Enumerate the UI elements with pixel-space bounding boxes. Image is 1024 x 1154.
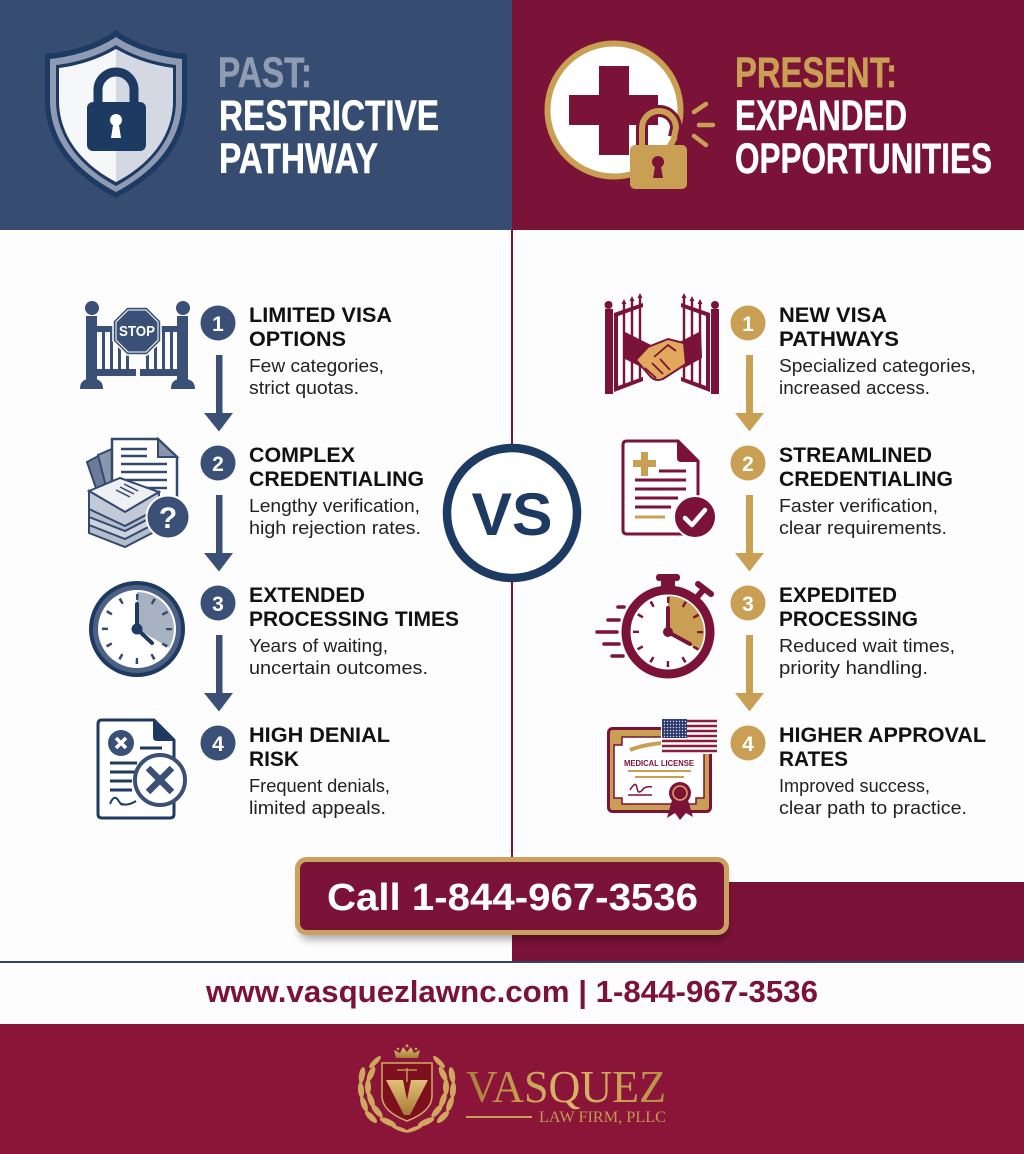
step 2 text: CREDENTIALING — [249, 468, 424, 491]
arrow 3 to 4 — [735, 635, 764, 712]
step 4 badge — [200, 726, 236, 760]
icon: open gates with handshake — [604, 293, 719, 394]
step 4 badge: 4 — [212, 733, 224, 756]
panel: past steps — [80, 301, 459, 818]
step 3 text: Reduced wait times, — [779, 635, 955, 656]
step 4 text — [779, 724, 986, 818]
step 3 text: uncertain outcomes. — [249, 657, 428, 678]
step 4 text: RATES — [779, 748, 848, 771]
step 2 text: STREAMLINED — [779, 444, 932, 467]
step 4 text: RISK — [249, 748, 299, 771]
step 2 badge: 2 — [742, 453, 754, 476]
step 4 text: HIGH DENIAL — [249, 724, 390, 747]
step 2 badge — [730, 446, 766, 480]
step 1 text: NEW VISA — [779, 304, 887, 327]
step 1 text: Few categories, — [249, 355, 384, 376]
step 4 text: limited appeals. — [249, 797, 386, 818]
logo: wordmark: LAW FIRM, PLLC — [539, 1109, 666, 1126]
step 3 badge: 3 — [212, 593, 224, 616]
arrow 2 to 3 — [204, 495, 233, 572]
step 3 text: priority handling. — [779, 657, 928, 678]
VS badge — [447, 448, 577, 578]
heading: present expanded opportunities: EXPANDED — [735, 92, 907, 140]
icon: paper stack with question mark: ? — [159, 502, 177, 535]
step 3 text — [249, 584, 459, 678]
icon: stopwatch — [597, 574, 711, 674]
panel: footer — [0, 1024, 1024, 1154]
step 2 text: Faster verification, — [779, 495, 938, 516]
step 4 text: Frequent denials, — [249, 775, 390, 796]
step 2 text: COMPLEX — [249, 444, 355, 467]
step 3 text: PROCESSING TIMES — [249, 608, 459, 631]
step 1 text: OPTIONS — [249, 328, 346, 351]
step 1 text: PATHWAYS — [779, 328, 899, 351]
icon: document with check — [623, 440, 716, 538]
step 1 text: LIMITED VISA — [249, 304, 392, 327]
step 4 text: Improved success, — [779, 775, 930, 796]
icon: medical cross with open lock — [548, 44, 713, 189]
panel: past header — [0, 0, 512, 230]
heading: present expanded opportunities: PRESENT: — [735, 49, 897, 97]
icon: denied document — [98, 720, 185, 818]
panel: present header — [512, 0, 1024, 230]
step 2 text — [249, 444, 424, 538]
logo: wordmark: VASQUEZ — [466, 1062, 666, 1112]
icon: stop gate — [80, 301, 195, 389]
icon: stop gate: STOP — [119, 323, 155, 340]
heading: past restrictive pathway: PAST: — [218, 49, 312, 97]
step 3 text — [779, 584, 955, 678]
step 2 badge: 2 — [212, 453, 224, 476]
step 1 text: Specialized categories, — [779, 355, 976, 376]
logo: crest — [357, 1044, 457, 1134]
step 3 text: EXPEDITED — [779, 584, 897, 607]
heading: past restrictive pathway — [218, 49, 439, 183]
heading: past restrictive pathway: PATHWAY — [219, 135, 378, 183]
step 2 text: high rejection rates. — [249, 517, 421, 538]
step 1 badge: 1 — [212, 313, 224, 336]
contact line: www.vasquezlawnc.com | 1-844-967-3536 — [205, 974, 818, 1009]
step 2 text: clear requirements. — [779, 517, 947, 538]
step 1 badge — [200, 306, 236, 340]
step 3 text: Years of waiting, — [249, 635, 388, 656]
step 4 text: clear path to practice. — [779, 797, 967, 818]
icon: medical license with flag: MEDICAL LICENSE — [624, 758, 694, 768]
step 4 text: HIGHER APPROVAL — [779, 724, 986, 747]
step 1 text — [249, 304, 392, 398]
call to action button — [298, 860, 727, 940]
step 2 badge — [200, 446, 236, 480]
step 1 text: strict quotas. — [249, 377, 359, 398]
step 3 text: EXTENDED — [249, 584, 365, 607]
heading: present expanded opportunities — [735, 49, 992, 183]
icon: paper stack with question mark — [87, 439, 190, 547]
step 3 badge — [200, 586, 236, 620]
icon: shield with lock — [45, 30, 187, 198]
icon: clock — [89, 581, 185, 677]
step 2 text — [779, 444, 953, 538]
arrow 3 to 4 — [204, 635, 233, 712]
step 1 text: increased access. — [779, 377, 930, 398]
step 3 badge: 3 — [742, 593, 754, 616]
step 1 badge: 1 — [742, 313, 754, 336]
arrow 1 to 2 — [204, 355, 233, 432]
step 4 badge: 4 — [742, 733, 754, 756]
arrow 2 to 3 — [735, 495, 764, 572]
step 4 badge — [730, 726, 766, 760]
panel: present steps — [597, 293, 986, 820]
step 1 text — [779, 304, 976, 398]
step 1 badge — [730, 306, 766, 340]
step 3 text: PROCESSING — [779, 608, 918, 631]
call to action button: Call 1-844-967-3536 — [327, 877, 698, 919]
step 4 text — [249, 724, 390, 818]
arrow 1 to 2 — [735, 355, 764, 432]
icon: medical license with flag — [608, 719, 718, 820]
VS badge: VS — [472, 481, 552, 548]
heading: past restrictive pathway: RESTRICTIVE — [219, 92, 439, 140]
step 3 badge — [730, 586, 766, 620]
step 2 text: CREDENTIALING — [779, 468, 953, 491]
step 2 text: Lengthy verification, — [249, 495, 420, 516]
